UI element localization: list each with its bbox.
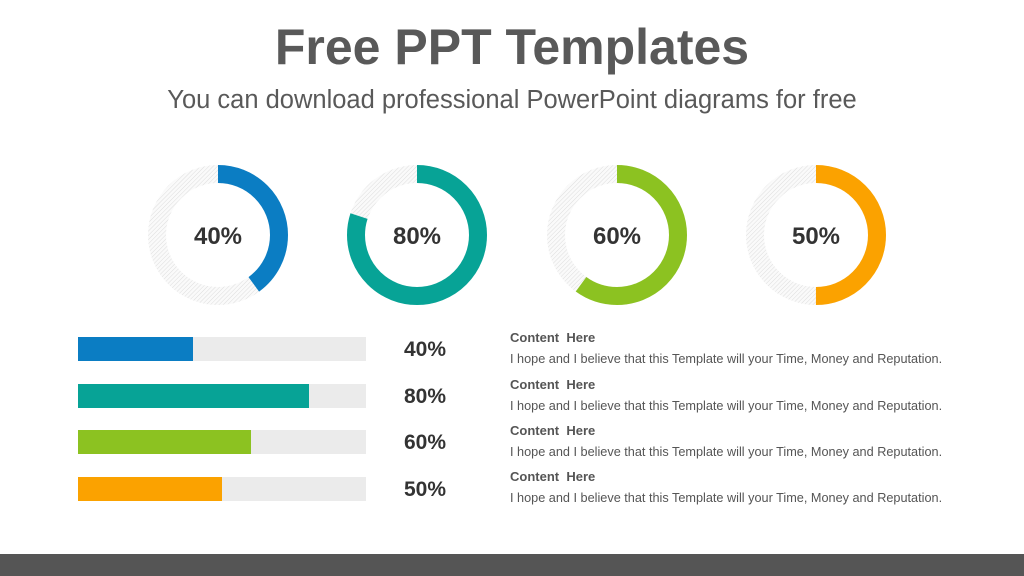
text block 3: Content Here (510, 423, 595, 438)
bar: 40% (78, 337, 366, 361)
donut: 40%: 40% (194, 223, 242, 250)
footer bar (0, 554, 1024, 576)
bar label 40%: 40% (404, 338, 446, 361)
donut: 50% (755, 174, 877, 296)
text block 2: I hope and I believe that this Template will your Time, Money and Reputation. (510, 399, 942, 413)
text block 1: Content Here (510, 330, 595, 345)
title: Free PPT Templates (275, 19, 749, 75)
bar label 50%: 50% (404, 478, 446, 501)
donut: 60% (556, 174, 678, 296)
donut: 80%: 80% (393, 223, 441, 250)
text block 4: I hope and I believe that this Template will your Time, Money and Reputation. (510, 491, 942, 505)
bar: 60% (78, 430, 366, 454)
donut charts (148, 165, 886, 305)
text block 4: Content Here (510, 469, 595, 484)
text block 1 (510, 330, 942, 366)
text block 2: Content Here (510, 377, 595, 392)
bar: 80% (78, 384, 366, 408)
text block 2 (510, 377, 942, 413)
bar label 80%: 80% (404, 385, 446, 408)
subtitle: You can download professional PowerPoint diagrams for free (167, 86, 857, 114)
bar: 50% (78, 477, 366, 501)
text block 3: I hope and I believe that this Template will your Time, Money and Reputation. (510, 445, 942, 459)
text block 4 (510, 469, 942, 505)
donut: 60%: 60% (593, 223, 641, 250)
donut: 50%: 50% (792, 223, 840, 250)
text block 3 (510, 423, 942, 459)
donut: 80% (356, 174, 478, 296)
bar label 60%: 60% (404, 431, 446, 454)
text block 1: I hope and I believe that this Template will your Time, Money and Reputation. (510, 352, 942, 366)
donut: 40% (157, 174, 279, 296)
